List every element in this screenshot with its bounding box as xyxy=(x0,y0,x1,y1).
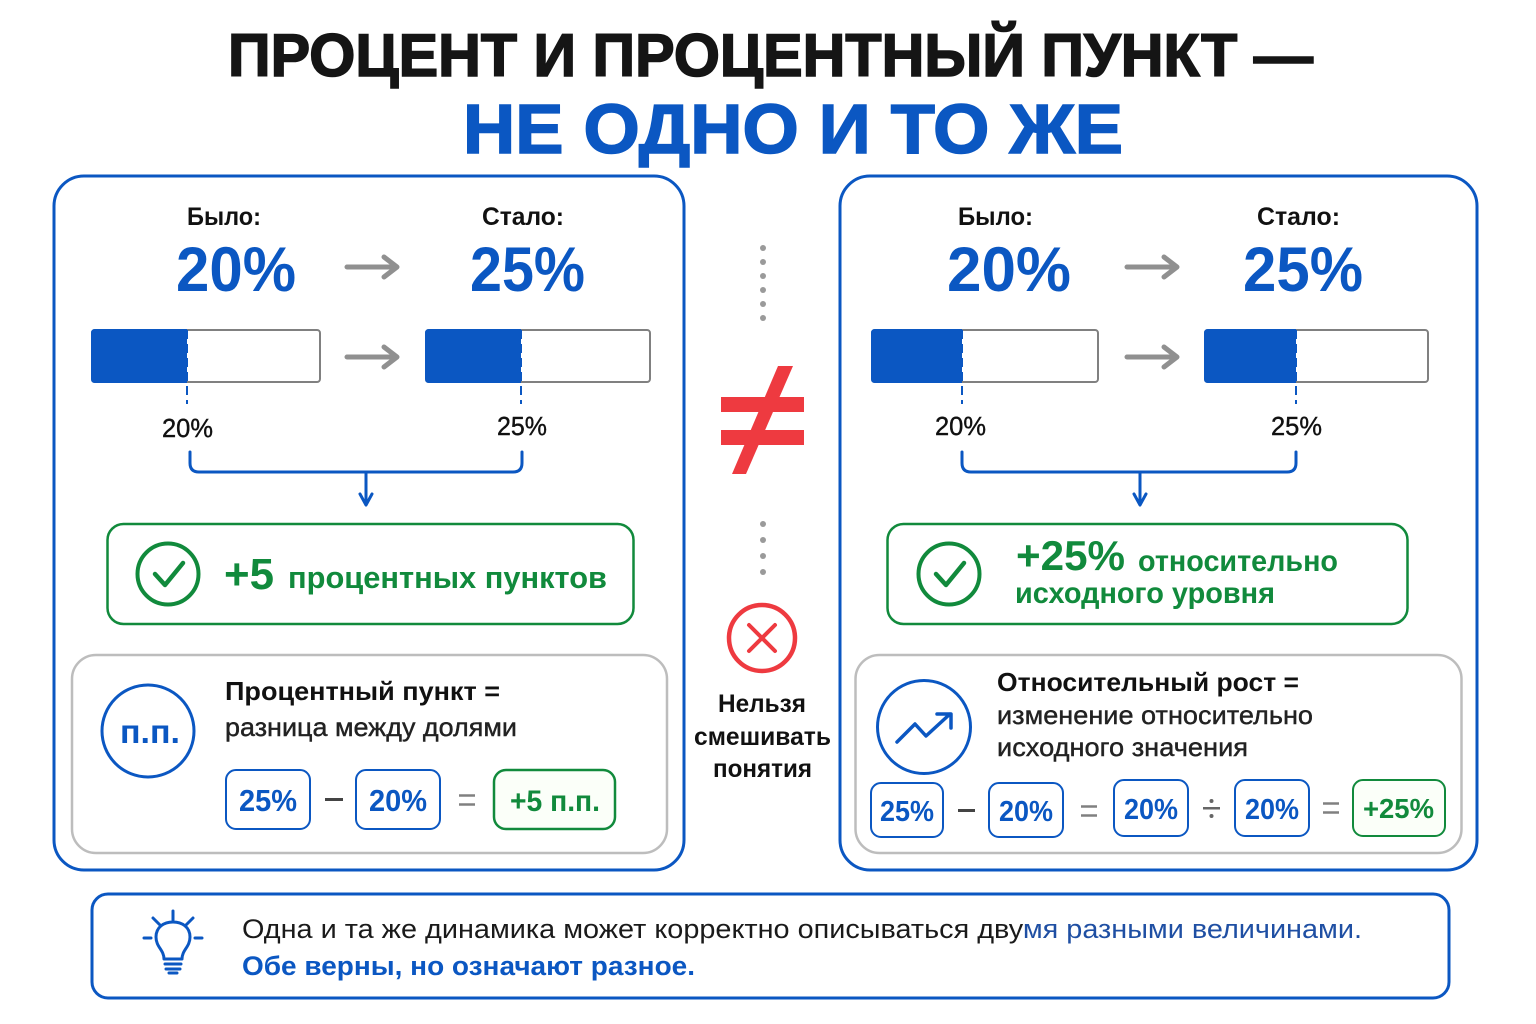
result text xyxy=(224,550,607,599)
formula: 20% xyxy=(1245,794,1299,826)
icon: cross xyxy=(729,605,795,671)
value: 20 percent: 20% xyxy=(176,235,296,305)
definition text: изменение относительно xyxy=(997,700,1313,730)
arrow: bars xyxy=(347,347,397,367)
formula: 25% xyxy=(880,796,934,828)
formula xyxy=(226,770,615,829)
takeaway text: Обе верны, но означают разное. xyxy=(242,951,695,981)
bar label: 25 percent: 25% xyxy=(1271,411,1322,441)
arrow: bars xyxy=(1127,347,1177,367)
definition text: разница между долями xyxy=(225,712,517,742)
dots: bottom xyxy=(760,521,766,575)
arrow: values xyxy=(347,257,397,277)
takeaway text: Одна и та же динамика может корректно описываться дву мя разными величинами. xyxy=(242,914,1362,944)
label: after: Стало: xyxy=(482,203,564,231)
warning text: Нельзя xyxy=(718,690,806,718)
value: 25 percent: 25% xyxy=(1243,235,1363,305)
icon: growth chart xyxy=(878,680,970,774)
dashed marker: 25 percent xyxy=(1295,330,1297,404)
label: before: Было: xyxy=(958,203,1033,231)
warning text: смешивать xyxy=(694,723,831,751)
icon: check xyxy=(918,544,980,604)
formula: 20% xyxy=(1124,794,1178,826)
bar label: 20 percent: 20% xyxy=(935,411,986,441)
dots: top xyxy=(760,245,766,321)
bracket arrow xyxy=(190,452,522,505)
value: 20 percent: 20% xyxy=(947,235,1071,305)
bar: 25 percent xyxy=(425,329,650,383)
formula xyxy=(871,780,1445,837)
icon: check xyxy=(138,544,198,604)
value: 25 percent: 25% xyxy=(470,235,585,305)
definition text xyxy=(997,700,1313,762)
result box: plus 5 points xyxy=(108,524,634,624)
label: after: Стало: xyxy=(1257,203,1340,231)
title xyxy=(228,22,1313,168)
bar: 25 percent xyxy=(1204,329,1428,383)
result text: +25% xyxy=(1016,532,1125,579)
title: НЕ ОДНО И ТО ЖЕ xyxy=(463,90,1123,168)
panel: relative growth xyxy=(840,176,1477,870)
title: ПРОЦЕНТ И ПРОЦЕНТНЫЙ ПУНКТ — xyxy=(228,22,1313,89)
definition heading: Относительный рост = xyxy=(997,667,1299,697)
definition heading: Процентный пункт = xyxy=(225,676,500,706)
takeaway box xyxy=(92,894,1449,998)
definition box: relative growth xyxy=(856,655,1462,853)
bar label: 25 percent: 25% xyxy=(497,411,547,441)
formula: +5 п.п. xyxy=(510,785,600,818)
icon: p.p. badge: п.п. xyxy=(120,713,180,750)
icon: light bulb xyxy=(144,911,202,973)
panel: percentage points xyxy=(54,176,684,870)
result text: +5 xyxy=(224,550,274,599)
bar: 20 percent xyxy=(91,329,320,383)
formula: 20% xyxy=(369,783,427,818)
arrow: values xyxy=(1127,257,1177,277)
formula: 20% xyxy=(999,796,1053,828)
formula: 25% xyxy=(239,783,297,818)
definition text: исходного значения xyxy=(997,732,1248,762)
takeaway text xyxy=(242,914,1362,981)
formula: +25% xyxy=(1363,793,1434,824)
definition box: percentage point xyxy=(72,655,667,853)
icon: not equal sign xyxy=(721,366,804,474)
bar label: 20 percent: 20% xyxy=(162,413,213,443)
result box: plus 25 percent xyxy=(888,524,1408,624)
label: before: Было: xyxy=(187,203,261,231)
result text: исходного уровня xyxy=(1015,577,1275,610)
result text: относительно xyxy=(1138,545,1338,578)
icon: p.p. badge xyxy=(102,685,194,777)
dashed marker: 20 percent xyxy=(961,330,963,404)
warning text xyxy=(694,690,831,783)
result text xyxy=(1015,532,1338,610)
bracket arrow xyxy=(962,452,1296,505)
result text: процентных пунктов xyxy=(288,560,607,595)
warning text: понятия xyxy=(713,755,812,783)
dashed marker: 20 percent xyxy=(186,330,188,404)
center divider: not equal xyxy=(694,245,831,783)
dashed marker: 25 percent xyxy=(520,330,522,404)
bar: 20 percent xyxy=(871,329,1098,383)
